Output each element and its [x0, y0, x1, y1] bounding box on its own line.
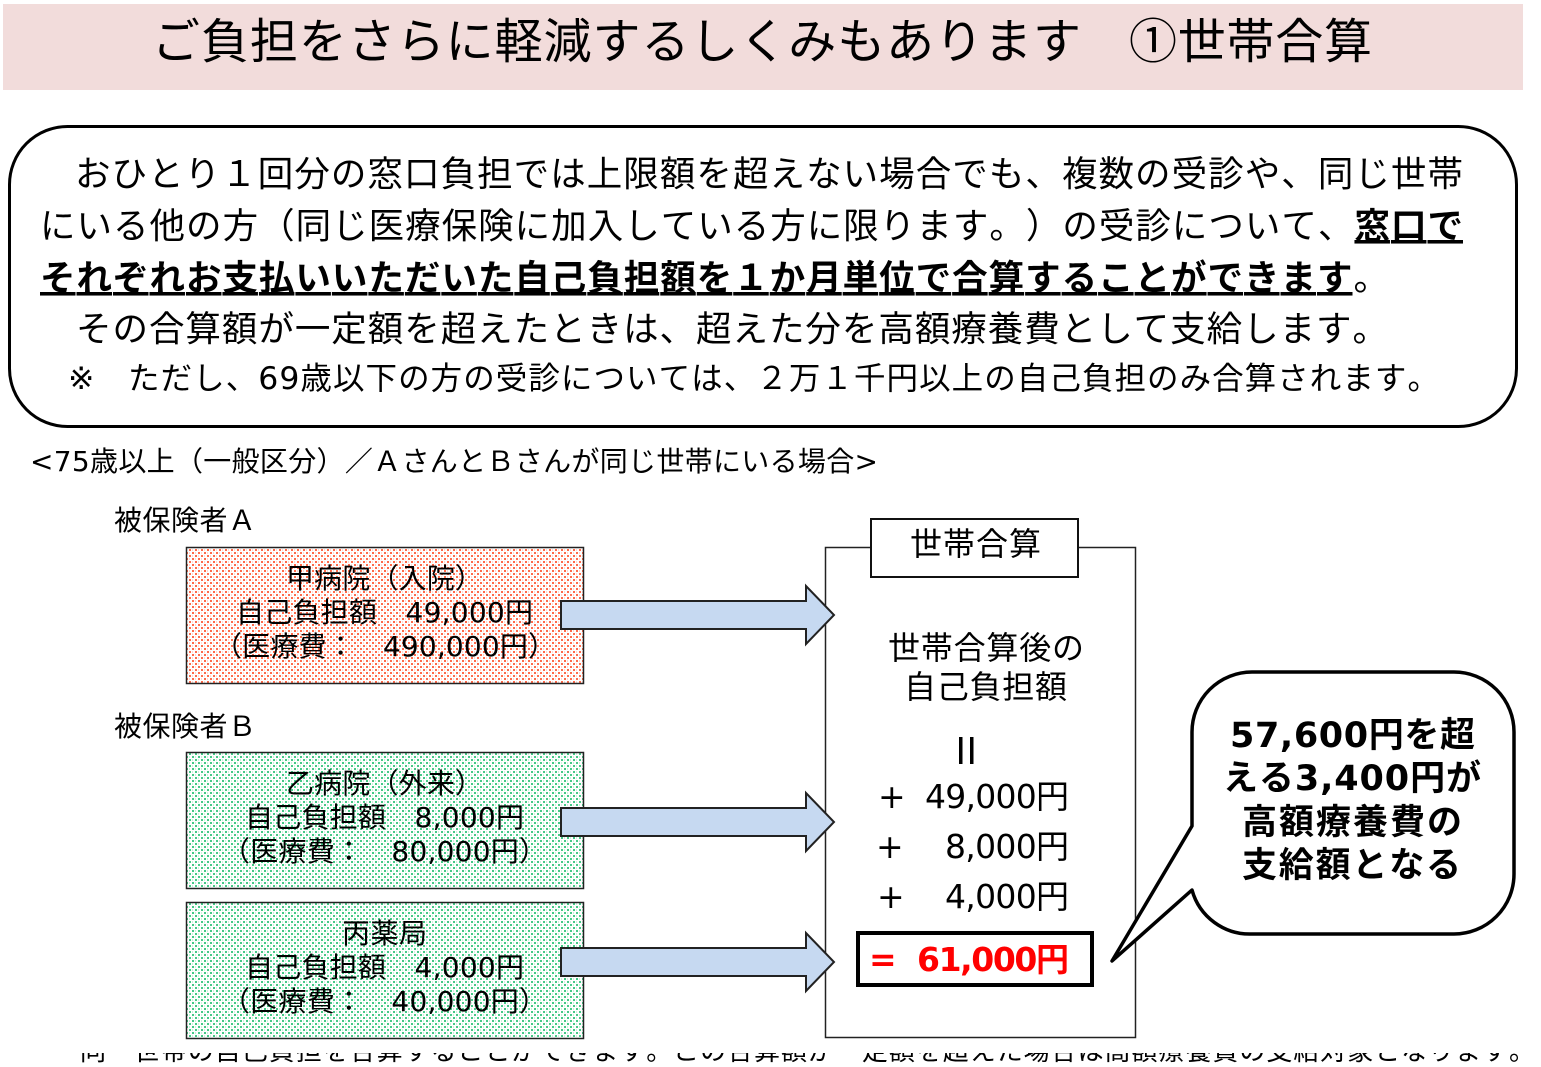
- panel: hospital B: 乙病院（外来）: [286, 767, 483, 800]
- arrow: hospital B: [561, 793, 834, 851]
- case heading: <75歳以上（一般区分）／ＡさんとＢさんが同じ世帯にいる場合>: [30, 445, 878, 478]
- panel: explanation text: その合算額が一定額を超えたときは、超えた分を高額療養費として支給します。: [76, 309, 1388, 350]
- panel: explanation text: [10, 126, 1516, 426]
- amounts: 4,000円: [945, 877, 1069, 916]
- label: household total heading: [871, 519, 1078, 577]
- equals sign rotated: [959, 737, 974, 764]
- amounts: 8,000円: [945, 827, 1069, 866]
- total box: 61,000円: [917, 940, 1069, 979]
- text: after total: 自己負担額: [904, 668, 1067, 706]
- panel: pharmacy: （医療費： 40,000円）: [222, 985, 547, 1018]
- amounts: [876, 777, 1069, 916]
- clipped footer text: 同一世帯の自己負担を合算することができます。この合算額が一定額を超えた場合は高額療養費の支給対象となります。: [80, 1037, 1535, 1067]
- label: household total heading: 世帯合算: [910, 525, 1041, 563]
- callout: える3,400円が: [1223, 759, 1481, 799]
- panel: household total: [826, 519, 1136, 1038]
- amounts: +: [877, 877, 905, 916]
- panel: hospital B: [186, 752, 584, 888]
- arrow: hospital A: [561, 586, 834, 644]
- total box: =: [869, 940, 897, 979]
- panel: pharmacy: 自己負担額 4,000円: [245, 951, 524, 984]
- panel: explanation text: おひとり１回分の窓口負担では上限額を超えない場合でも、複数の受診や、同じ世帯: [75, 154, 1463, 195]
- callout: 高額療養費の: [1242, 803, 1462, 843]
- panel: hospital A: （医療費： 490,000円）: [214, 630, 556, 663]
- label: insured B (heading): 被保険者Ｂ: [114, 710, 256, 743]
- label: insured A: 被保険者Ａ: [114, 504, 256, 537]
- title banner: [3, 2, 1523, 90]
- panel: pharmacy: [186, 902, 584, 1038]
- title banner: ①世帯合算: [1129, 2, 1372, 72]
- amounts: +: [878, 777, 906, 816]
- text: after total: [888, 629, 1084, 706]
- panel: explanation text: それぞれお支払いいただいた自己負担額を１か月単位で合算することができます。: [40, 258, 1389, 299]
- callout: [1112, 672, 1514, 961]
- title banner: ご負担をさらに軽減するしくみもあります: [152, 2, 1081, 72]
- amounts: 49,000円: [925, 777, 1069, 816]
- panel: explanation text: にいる他の方（同じ医療保険に加入している方に限ります。）の受診について、窓口で: [40, 206, 1463, 247]
- callout: 57,600円を超: [1230, 716, 1475, 756]
- panel: hospital A: 甲病院（入院）: [286, 562, 483, 595]
- panel: hospital A: 自己負担額 49,000円: [236, 596, 533, 629]
- panel: hospital A: [186, 548, 584, 684]
- panel: hospital B: 自己負担額 8,000円: [245, 801, 524, 834]
- callout: 支給額となる: [1242, 846, 1461, 886]
- panel: hospital B: （医療費： 80,000円）: [222, 835, 547, 868]
- text: after total: 世帯合算後の: [888, 629, 1084, 667]
- arrow: pharmacy: [561, 933, 834, 991]
- total box: [858, 933, 1092, 985]
- panel: pharmacy: 丙薬局: [342, 917, 427, 950]
- panel: explanation text: ※ ただし、69歳以下の方の受診については、２万１千円以上の自己負担のみ合算されます。: [68, 361, 1439, 397]
- amounts: +: [876, 827, 904, 866]
